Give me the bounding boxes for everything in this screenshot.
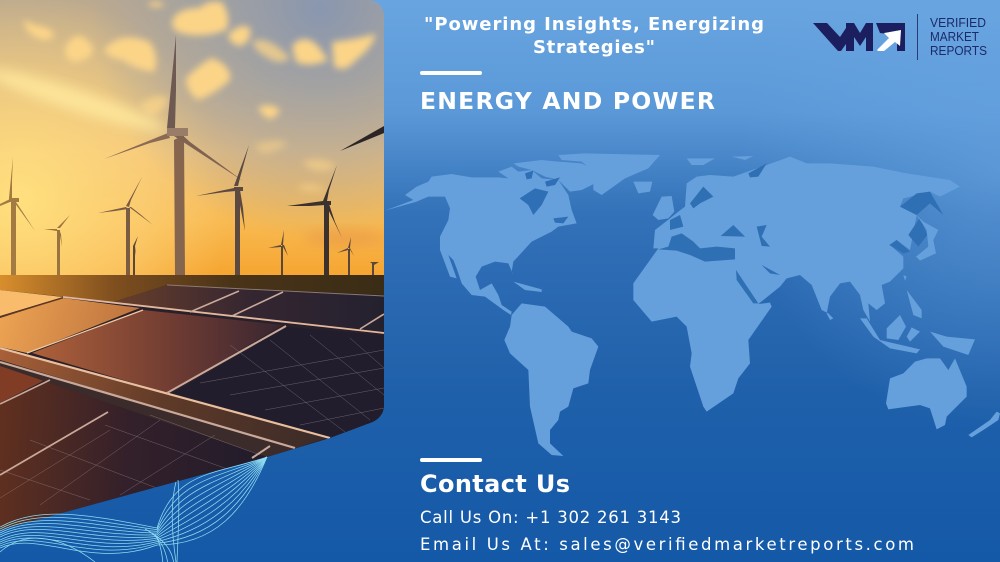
tagline: Strategies" — [533, 37, 655, 58]
Scandinavia — [653, 196, 674, 220]
tagline: "Powering Insights, Energizing — [424, 14, 764, 35]
turbine 4 — [98, 177, 153, 275]
email: Email Us At: sales@verifiedmarketreports.com — [420, 535, 914, 554]
logo wordmark: VERIFIED — [930, 16, 986, 30]
phone: Call Us On: +1 302 261 3143 — [420, 508, 681, 527]
solar panels — [0, 284, 384, 530]
Australia — [886, 358, 967, 429]
cropped blade at right edge — [340, 126, 384, 151]
support bar — [0, 348, 330, 449]
North America — [385, 167, 577, 315]
map: Asian islands and Australia — [860, 215, 1000, 437]
turbine 6 — [44, 215, 70, 275]
world map — [385, 153, 1000, 456]
right dark panel — [173, 327, 384, 437]
decorative wave mesh — [0, 457, 267, 562]
base panel shadow — [0, 285, 384, 530]
New Zealand — [968, 412, 1000, 437]
contact block — [420, 470, 914, 554]
map: inland seas — [658, 163, 943, 303]
upper left glowing panels — [0, 290, 63, 316]
accent bar contact — [420, 458, 482, 462]
ground strip — [0, 275, 384, 302]
Greenland — [558, 153, 660, 195]
lower left panel — [0, 366, 44, 403]
turbine 3 — [287, 165, 342, 275]
northern islands — [687, 158, 715, 165]
logo wordmark: MARKET — [930, 30, 979, 44]
Arctic islands — [513, 160, 595, 192]
turbine 2 — [196, 145, 249, 275]
logo wordmark: REPORTS — [930, 44, 987, 58]
South America — [504, 303, 598, 456]
wind turbines — [0, 35, 384, 275]
photo panel: wind turbines and solar panels — [0, 0, 387, 562]
tagline — [424, 14, 764, 58]
middle panel — [32, 310, 283, 393]
sky — [0, 0, 384, 276]
lower panels — [0, 380, 267, 530]
turbine 5 — [0, 157, 35, 275]
accent bar top — [420, 71, 482, 75]
small turbines — [133, 230, 379, 275]
top row panels — [114, 285, 380, 319]
map: Hudson Bay and great lakes seas — [520, 171, 568, 223]
logo divider — [917, 14, 918, 60]
logo wordmark — [930, 16, 987, 58]
solar cell grid lines — [0, 335, 384, 505]
Iceland — [633, 182, 652, 193]
contact heading: Contact Us — [420, 470, 570, 498]
sunset clouds — [24, 2, 376, 192]
logo mark — [813, 23, 905, 51]
map: Eurasia and Africa — [633, 156, 960, 412]
Cuba — [513, 282, 542, 292]
large turbine — [104, 35, 243, 275]
logo: Verified Market Reports — [813, 14, 987, 60]
rails and seams — [0, 285, 384, 475]
glowing cloud streak — [0, 66, 164, 134]
heading: energy and power: ENERGY AND POWER — [420, 87, 715, 115]
map: Americas and Greenland — [385, 153, 674, 456]
